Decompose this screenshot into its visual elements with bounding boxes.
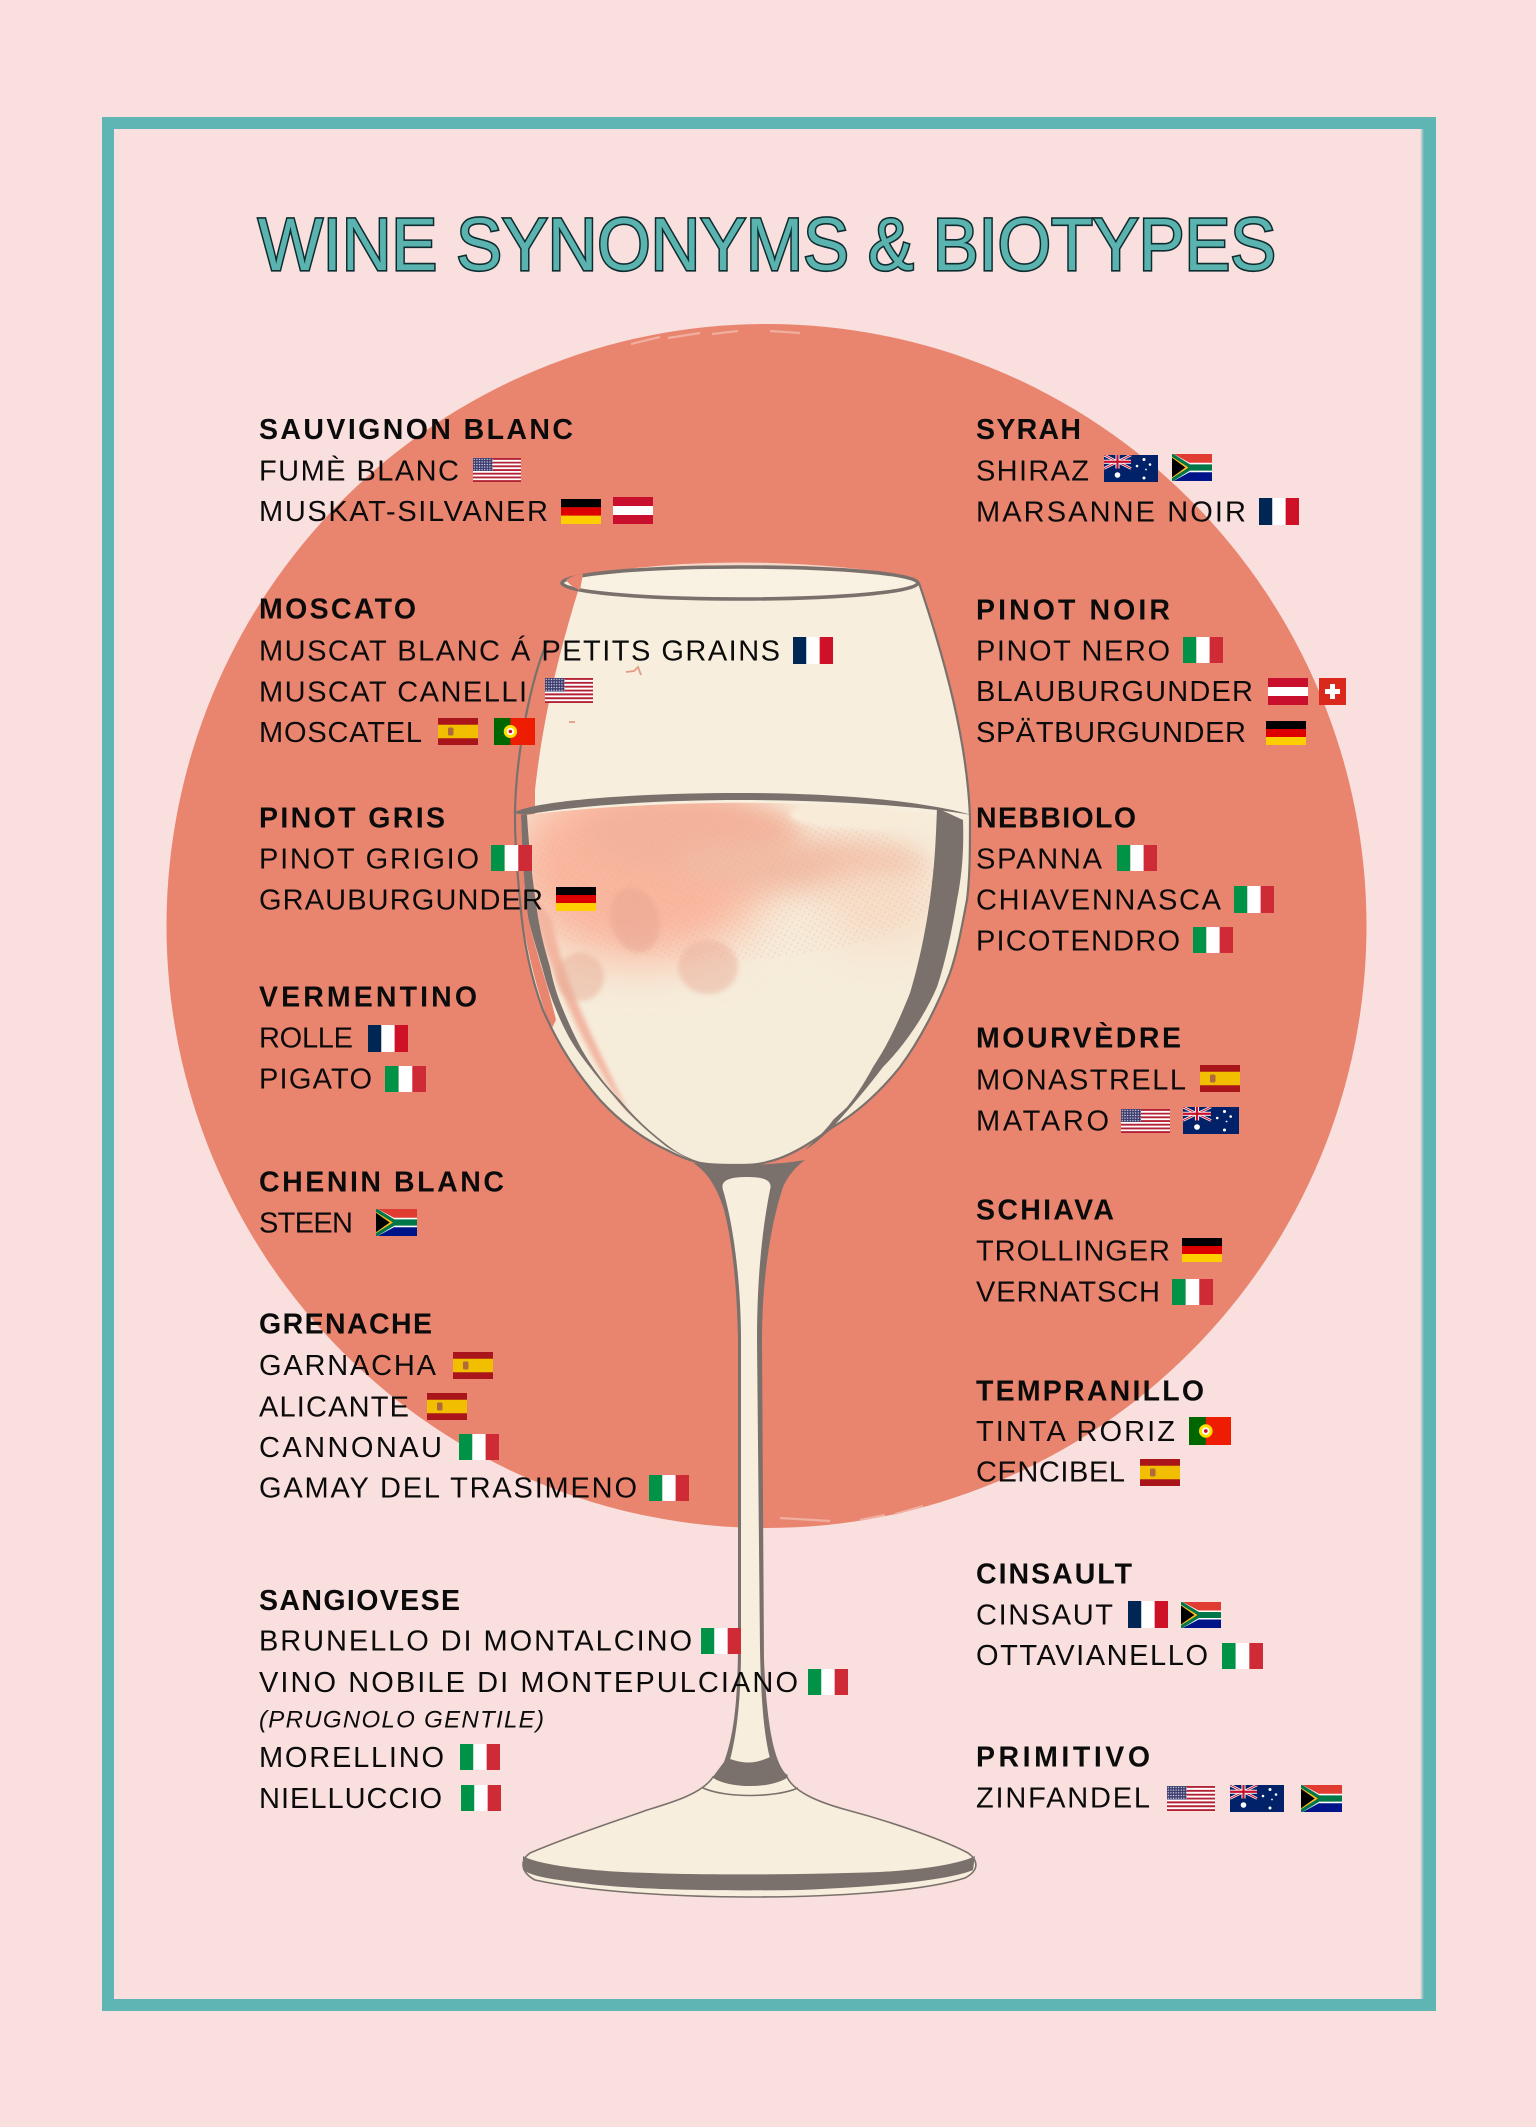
grey reflection band right — [805, 808, 963, 1150]
group: Vermentino: ROLLE — [259, 1022, 353, 1054]
flag: France — [1259, 498, 1299, 525]
small coral marks in glass — [569, 667, 641, 722]
group: Mourvèdre — [976, 1022, 1240, 1138]
flag: Portugal — [494, 718, 535, 745]
stem outer — [693, 1160, 805, 1785]
group: Sangiovese: BRUNELLO DI MONTALCINO — [259, 1626, 692, 1658]
group: Pinot Noir: BLAUBURGUNDER — [976, 676, 1253, 708]
group: Mourvèdre: MOURVÈDRE — [976, 1022, 1181, 1054]
grey reflection band left — [521, 815, 700, 1162]
group: Vermentino: VERMENTINO — [259, 982, 477, 1014]
flag: Italy — [701, 1628, 741, 1654]
group: Moscato: MOSCATO — [259, 594, 416, 626]
flag: Switzerland — [1319, 678, 1346, 705]
group: Grenache: ALICANTE — [259, 1392, 409, 1424]
flag: Italy — [1183, 637, 1223, 663]
group: Sauvignon Blanc: MUSKAT-SILVANER — [259, 496, 548, 528]
group: Pinot Noir: PINOT NOIR — [976, 594, 1170, 626]
wine body with blush gradient — [526, 802, 936, 1113]
flag: Italy — [460, 1744, 500, 1770]
flag: Australia — [1183, 1107, 1239, 1134]
group: Chenin Blanc: CHENIN BLANC — [259, 1166, 504, 1198]
flag: USA — [1167, 1786, 1215, 1811]
flag: France — [1128, 1601, 1168, 1628]
coral inside rim left — [566, 574, 583, 590]
group: Pinot Gris: PINOT GRIGIO — [259, 844, 479, 876]
group: Tempranillo: TINTA RORIZ — [976, 1416, 1175, 1448]
foot — [523, 1777, 976, 1897]
flag: Germany — [1182, 1238, 1222, 1262]
group: Pinot Gris: GRAUBURGUNDER — [259, 884, 543, 916]
group: Moscato: MUSCAT BLANC Á PETITS GRAINS — [259, 634, 780, 668]
frame: teal border — [108, 123, 1430, 2005]
group: Cinsault: CINSAULT — [976, 1558, 1133, 1590]
group: Schiava: SCHIAVA — [976, 1194, 1114, 1226]
flag: Austria — [613, 497, 653, 524]
group: Sangiovese — [259, 1585, 848, 1815]
group: Cinsault — [976, 1558, 1263, 1672]
group: Sangiovese: SANGIOVESE — [259, 1585, 460, 1617]
flag: USA — [473, 458, 521, 482]
group: Pinot Noir: SPÄTBURGUNDER — [976, 717, 1246, 749]
group: Nebbiolo: CHIAVENNASCA — [976, 884, 1222, 916]
flag: Spain — [1140, 1459, 1180, 1486]
group: Chenin Blanc: STEEN — [259, 1208, 353, 1240]
flag: South Africa — [1181, 1602, 1221, 1628]
group: Chenin Blanc — [259, 1166, 504, 1240]
group: Cinsault: OTTAVIANELLO — [976, 1640, 1208, 1672]
stem inner — [722, 1177, 771, 1763]
flag: Spain — [427, 1393, 467, 1420]
group: Primitivo: PRIMITIVO — [976, 1742, 1150, 1774]
group: Sangiovese: (PRUGNOLO GENTILE) — [259, 1706, 544, 1734]
flag: Spain — [453, 1352, 493, 1379]
group: Nebbiolo — [976, 802, 1274, 958]
group: Schiava: TROLLINGER — [976, 1236, 1170, 1268]
group: Pinot Gris: PINOT GRIS — [259, 802, 445, 834]
flag: France — [368, 1025, 408, 1052]
flag: Italy — [1234, 886, 1274, 913]
group: Sangiovese: NIELLUCCIO — [259, 1783, 442, 1815]
flag: Spain — [438, 718, 478, 745]
group: Nebbiolo: NEBBIOLO — [976, 802, 1136, 834]
group: Tempranillo: CENCIBEL — [976, 1456, 1125, 1488]
group: Cinsault: CINSAUT — [976, 1600, 1113, 1632]
flag: Germany — [1266, 721, 1306, 745]
group: Sangiovese: VINO NOBILE DI MONTEPULCIANO — [259, 1667, 798, 1699]
flag: Italy — [385, 1066, 426, 1092]
foot shadow band — [523, 1856, 975, 1890]
wine level line — [513, 793, 972, 815]
group: Vermentino — [259, 982, 477, 1096]
stem base ring — [703, 1788, 798, 1796]
group: Syrah: MARSANNE NOIR — [976, 496, 1246, 528]
flag: Italy — [1117, 845, 1157, 871]
group: Nebbiolo: PICOTENDRO — [976, 926, 1180, 958]
flag: Germany — [561, 499, 601, 524]
flag: Austria — [1268, 678, 1308, 705]
stem base dark band — [713, 1757, 788, 1785]
wine glass illustration — [500, 564, 980, 1897]
group: Primitivo — [976, 1742, 1342, 1814]
bowl outline — [515, 583, 970, 1165]
group: Pinot Gris — [259, 802, 596, 916]
coral sliver on left of bowl — [516, 815, 556, 1030]
group: Moscato: MOSCATEL — [259, 717, 422, 749]
group: Sauvignon Blanc: FUMÈ BLANC — [259, 454, 459, 488]
flag: South Africa — [1172, 454, 1212, 481]
group: Sauvignon Blanc: SAUVIGNON BLANC — [259, 414, 573, 446]
group: Grenache — [259, 1308, 689, 1504]
flag: Italy — [461, 1785, 501, 1811]
group: Syrah — [976, 414, 1299, 528]
flag: USA — [1121, 1109, 1170, 1133]
group: Pinot Noir: PINOT NERO — [976, 636, 1170, 668]
glass bowl: lower section — [515, 817, 970, 1165]
flag: USA — [545, 678, 593, 703]
group: Tempranillo — [976, 1376, 1231, 1488]
group: Mourvèdre: MONASTRELL — [976, 1064, 1186, 1096]
flag: Italy — [649, 1475, 689, 1501]
group: Schiava — [976, 1194, 1222, 1308]
group: Mourvèdre: MATARO — [976, 1106, 1109, 1138]
group: Tempranillo: TEMPRANILLO — [976, 1376, 1204, 1408]
group: Grenache: GRENACHE — [259, 1308, 432, 1340]
group: Pinot Noir — [976, 594, 1346, 749]
group: Nebbiolo: SPANNA — [976, 844, 1103, 876]
group: Schiava: VERNATSCH — [976, 1276, 1160, 1308]
rim ellipse — [562, 567, 918, 599]
group: Syrah: SYRAH — [976, 414, 1081, 446]
group: Vermentino: PIGATO — [259, 1064, 372, 1096]
flag: Portugal — [1189, 1417, 1231, 1445]
group: Moscato: MUSCAT CANELLI — [259, 676, 527, 708]
group: Grenache: GARNACHA — [259, 1350, 437, 1382]
group: Sangiovese: MORELLINO — [259, 1742, 444, 1774]
group: Grenache: GAMAY DEL TRASIMENO — [259, 1472, 637, 1504]
flag: South Africa — [376, 1209, 417, 1236]
flag: Germany — [556, 887, 596, 911]
group: Primitivo: ZINFANDEL — [976, 1782, 1150, 1814]
flag: Italy — [1222, 1643, 1263, 1669]
flag: South Africa — [1301, 1785, 1342, 1812]
glass bowl: upper clear section — [535, 578, 970, 817]
title: WINE SYNONYMS & BIOTYPES — [258, 203, 1276, 286]
flag: Australia — [1230, 1785, 1284, 1812]
flag: Italy — [459, 1434, 499, 1460]
group: Moscato — [259, 594, 833, 749]
group: Grenache: CANNONAU — [259, 1432, 442, 1464]
coral circle — [166, 324, 1366, 1528]
flag: Australia — [1104, 455, 1158, 482]
flag: Italy — [1193, 927, 1233, 953]
group: Sauvignon Blanc — [259, 414, 653, 528]
flag: Italy — [491, 845, 532, 871]
flag: Spain — [1200, 1065, 1240, 1092]
group: Syrah: SHIRAZ — [976, 456, 1089, 488]
flag: Italy — [1172, 1279, 1213, 1305]
flag: Italy — [808, 1669, 848, 1695]
rim highlight — [572, 564, 900, 579]
flag: France — [793, 637, 833, 664]
